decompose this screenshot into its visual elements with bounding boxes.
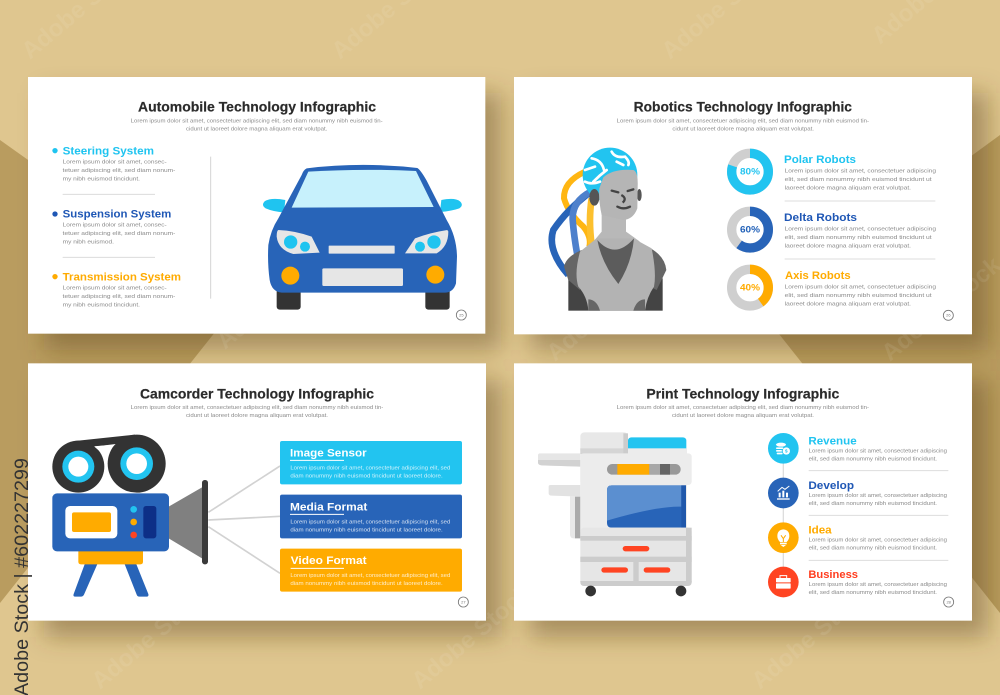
box: image sensor: Lorem ipsum dolor sit amet, consectetuer adipiscing elit, sed bbox=[290, 466, 450, 472]
panel: robotics technology bbox=[514, 77, 972, 334]
subtitle: camcorder: Lorem ipsum dolor sit amet, consectetuer adipiscing elit, sed diam nonummy nibh euismod tin- bbox=[131, 405, 384, 411]
watermark pattern: Adobe Stock bbox=[542, 251, 672, 367]
item: suspension system: Lorem ipsum dolor sit amet, consec- bbox=[63, 223, 167, 229]
icon: camcorder bbox=[52, 435, 208, 597]
page number 26: 26 bbox=[946, 313, 951, 318]
item: delta robots: Lorem ipsum dolor sit amet, consectetuer adipiscing bbox=[785, 227, 936, 233]
item: transmission system: my nibh euismod tincidunt. bbox=[63, 302, 140, 308]
item: revenue: elit, sed diam nonummy nibh euismod tincidunt. bbox=[809, 457, 937, 463]
subtitle: camcorder bbox=[131, 405, 384, 419]
item: axis robots bbox=[785, 270, 936, 307]
item: polar robots: laoreet dolore magna aliquam erat volutpat. bbox=[785, 185, 911, 191]
box: video format bbox=[280, 549, 462, 592]
subtitle: camcorder: cidunt ut laoreet dolore magna aliquam erat volutpat. bbox=[186, 413, 328, 419]
item: revenue: Lorem ipsum dolor sit amet, consectetuer adipiscing bbox=[809, 449, 947, 455]
watermark pattern: Adobe Stock bbox=[747, 579, 877, 695]
item: transmission system: Lorem ipsum dolor sit amet, consec- bbox=[63, 286, 167, 292]
connector lines bbox=[208, 466, 280, 573]
item: business: elit, sed diam nonummy nibh euismod tincidunt. bbox=[809, 590, 937, 596]
donut chart: polar robots 80%: 80% bbox=[740, 167, 760, 177]
item: idea: Lorem ipsum dolor sit amet, consectetuer adipiscing bbox=[809, 538, 947, 544]
item: suspension system bbox=[52, 208, 175, 245]
item: axis robots: laoreet dolore magna aliquam erat volutpat. bbox=[785, 301, 911, 307]
item: polar robots bbox=[784, 154, 936, 191]
donut chart: axis robots 40%: 40% bbox=[740, 283, 760, 293]
donut chart: polar robots 80% bbox=[732, 153, 768, 190]
box: media format: Media Format bbox=[290, 501, 368, 513]
subtitle: automobile: cidunt ut laoreet dolore magna aliquam erat volutpat. bbox=[186, 126, 327, 132]
item: idea: elit, sed diam nonummy nibh euismod tincidunt. bbox=[809, 546, 937, 552]
donut chart: delta robots 60%: 60% bbox=[740, 225, 760, 235]
item: steering system: tetuer adipiscing elit, sed diam nonum- bbox=[63, 168, 175, 174]
subtitle: automobile: Lorem ipsum dolor sit amet, consectetuer adipiscing elit, sed diam nonummy nibh euismod tin- bbox=[131, 118, 383, 124]
item: business: Business bbox=[808, 569, 858, 581]
page number 25: 25 bbox=[459, 312, 464, 317]
item: steering system: my nibh euismod tincidunt. bbox=[63, 176, 140, 182]
item: polar robots: elit, sed diam nonummy nibh euismod tincidunt ut bbox=[785, 177, 932, 183]
subtitle: print bbox=[617, 405, 869, 419]
item: suspension system: Suspension System bbox=[63, 208, 171, 220]
item: develop: elit, sed diam nonummy nibh euismod tincidunt. bbox=[809, 501, 937, 507]
page number 27: 27 bbox=[461, 599, 466, 604]
subtitle: print: Lorem ipsum dolor sit amet, consectetuer adipiscing elit, sed diam nonummy nibh euismod tin- bbox=[617, 405, 869, 411]
subtitle: robotics bbox=[617, 118, 869, 132]
panel: camcorder technology bbox=[28, 363, 486, 621]
item: suspension system: my nibh euismod. bbox=[63, 239, 114, 245]
item: develop: Develop bbox=[808, 480, 854, 492]
subtitle: robotics: Lorem ipsum dolor sit amet, consectetuer adipiscing elit, sed diam nonummy nibh euismod tin- bbox=[617, 118, 869, 124]
item: revenue: Revenue bbox=[808, 436, 857, 448]
icon: blue car bbox=[263, 165, 462, 310]
item: delta robots: laoreet dolore magna aliquam erat volutpat. bbox=[785, 243, 911, 249]
panel: automobile technology bbox=[28, 77, 485, 334]
box: video format: Lorem ipsum dolor sit amet, consectetuer adipiscing elit, sed bbox=[290, 573, 450, 579]
title: camcorder: Camcorder Technology Infographic bbox=[140, 385, 374, 401]
subtitle: robotics: cidunt ut laoreet dolore magna aliquam erat volutpat. bbox=[672, 126, 814, 132]
item: business bbox=[768, 567, 947, 597]
item: axis robots: elit, sed diam nonummy nibh euismod tincidunt ut bbox=[785, 293, 932, 299]
icon: printer bbox=[538, 432, 692, 596]
item: transmission system bbox=[52, 271, 181, 308]
watermark pattern: Adobe Stock bbox=[87, 579, 217, 695]
box: video format: Video Format bbox=[291, 555, 367, 567]
box: image sensor: Image Sensor bbox=[290, 447, 367, 459]
watermark pattern: Adobe Stock bbox=[212, 239, 342, 355]
title: robotics: Robotics Technology Infographic bbox=[634, 99, 852, 115]
item: develop: Lorem ipsum dolor sit amet, consectetuer adipiscing bbox=[809, 493, 947, 499]
item: delta robots: elit, sed diam nonummy nibh euismod tincidunt ut bbox=[785, 235, 932, 241]
box: image sensor: diam nonummy nibh euismod tincidunt ut laoreet dolore. bbox=[290, 474, 443, 480]
donut chart: delta robots 60% bbox=[732, 211, 768, 248]
icon: robot mannequin with brain bbox=[552, 148, 666, 311]
item: suspension system: tetuer adipiscing elit, sed diam nonum- bbox=[63, 231, 175, 237]
item: business: Lorem ipsum dolor sit amet, consectetuer adipiscing bbox=[809, 582, 947, 588]
item: steering system: Steering System bbox=[63, 145, 154, 157]
item: steering system: Lorem ipsum dolor sit amet, consec- bbox=[63, 160, 167, 166]
item: idea: Idea bbox=[808, 525, 832, 537]
subtitle: automobile bbox=[131, 118, 383, 132]
title: automobile: Automobile Technology Infographic bbox=[138, 99, 376, 115]
box: media format: Lorem ipsum dolor sit amet, consectetuer adipiscing elit, sed bbox=[290, 519, 450, 525]
box: image sensor bbox=[280, 441, 462, 484]
page number 26 bbox=[943, 310, 953, 320]
item: axis robots: Lorem ipsum dolor sit amet, consectetuer adipiscing bbox=[785, 285, 936, 291]
item: idea bbox=[768, 522, 947, 553]
panel: print technology bbox=[514, 363, 972, 621]
item: delta robots: Delta Robots bbox=[784, 212, 857, 224]
item: polar robots: Polar Robots bbox=[784, 154, 856, 166]
item: axis robots: Axis Robots bbox=[785, 270, 851, 282]
box: media format: diam nonummy nibh euismod tincidunt ut laoreet dolore. bbox=[290, 527, 443, 533]
box: video format: diam nonummy nibh euismod tincidunt ut laoreet dolore. bbox=[290, 581, 443, 587]
page number 25 bbox=[456, 310, 466, 320]
page number 27 bbox=[458, 597, 468, 607]
item: revenue bbox=[768, 433, 947, 464]
page number 28: 28 bbox=[946, 599, 952, 604]
item: steering system bbox=[52, 145, 175, 182]
item: revenue: $ bbox=[785, 449, 788, 454]
item: transmission system: Transmission System bbox=[63, 271, 181, 283]
watermark pattern: Adobe Stock bbox=[407, 579, 537, 695]
page number 28 bbox=[944, 597, 954, 607]
item: develop bbox=[768, 478, 947, 508]
donut chart: axis robots 40% bbox=[732, 269, 768, 306]
panel shadows bbox=[44, 93, 988, 637]
box: media format bbox=[280, 495, 462, 538]
item: polar robots: Lorem ipsum dolor sit amet, consectetuer adipiscing bbox=[785, 169, 936, 175]
item: transmission system: tetuer adipiscing elit, sed diam nonum- bbox=[63, 294, 175, 300]
subtitle: print: cidunt ut laoreet dolore magna aliquam erat volutpat. bbox=[672, 413, 814, 419]
item: delta robots bbox=[784, 212, 936, 249]
stock id label: Adobe Stock | #602227299 bbox=[12, 458, 33, 695]
title: print: Print Technology Infographic bbox=[646, 385, 840, 401]
